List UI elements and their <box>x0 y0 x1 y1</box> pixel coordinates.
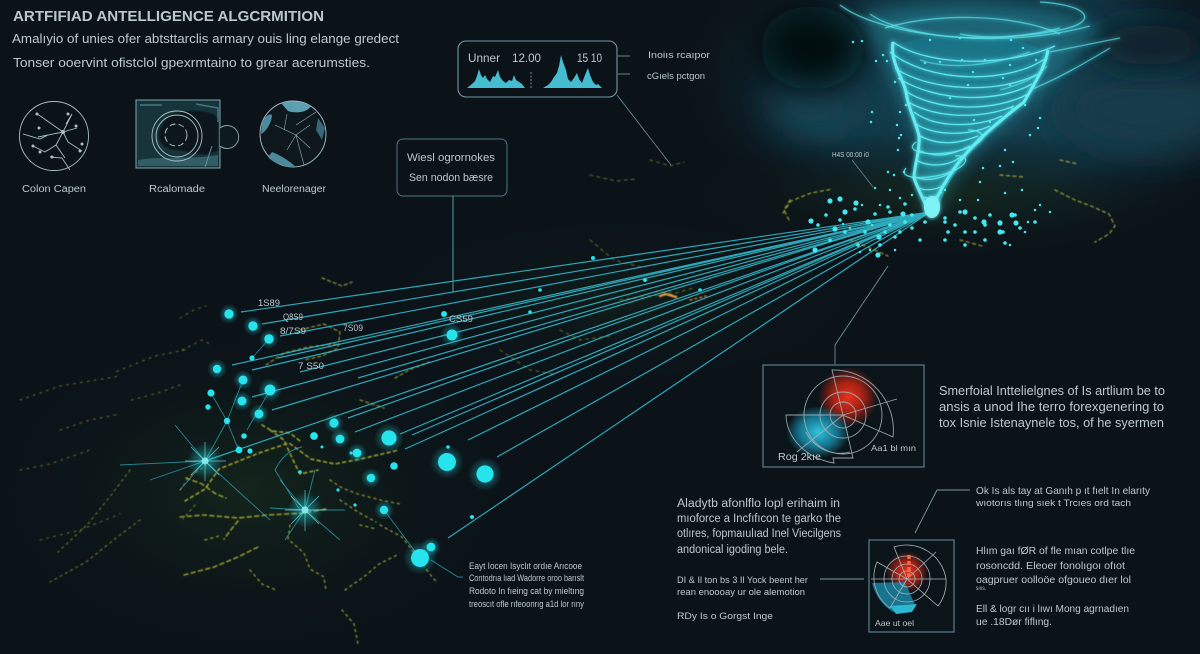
chart legend labels: Inoiıs rcaıpor <box>648 50 710 60</box>
subtitle text block: Amalıyio of unies ofer abtsttarclis armary ouis ling elange gredect <box>12 31 399 46</box>
radar two leader line <box>915 490 970 533</box>
text block: top-right note: Ok Is als tay at Ganıh p ıt fıelt In elarıty <box>976 485 1151 497</box>
text block: right notes: ue .18Dør fiflıng. <box>976 617 1052 628</box>
icon: colon capen network circle <box>20 102 88 170</box>
chart leader line <box>617 95 671 165</box>
text block: right notes: oagpruer oolloöe ofgoueo dıer lol <box>976 575 1131 586</box>
title: ARTFIFIAD ANTELLIGENCE ALGCRMITION <box>13 8 324 25</box>
text block: right notes: Ell & logr cıı i lıwı Mong agrnadıen <box>976 604 1129 615</box>
map value labels: CS59 <box>449 314 473 324</box>
text block: small notes: DI & Il ton bs 3 Il Yock beent her <box>677 575 808 586</box>
node dots <box>205 256 702 567</box>
callout: wind observations: Sen nodon bæsre <box>409 172 493 184</box>
panel: radar one <box>763 365 924 467</box>
map node network <box>120 256 702 577</box>
funnel swirl rings <box>840 2 1120 198</box>
map value labels <box>258 298 473 371</box>
label: neelorenager: Neelorenager <box>262 184 327 195</box>
map city lights <box>20 160 1115 644</box>
text block: lower map note: Contodrıa lıad Wadorre oroo barıslt <box>469 573 584 583</box>
node connectors <box>120 339 463 577</box>
text block: top-right note: wıotorıs tlıng sıek t Trcıes ord tach <box>975 498 1131 509</box>
tornado location label <box>832 152 873 187</box>
icon: neural map globe <box>260 101 326 167</box>
panel: radar one: Rog 2kıe <box>778 452 821 463</box>
radar leader line <box>835 266 888 364</box>
chart: left waveform <box>467 69 525 88</box>
text block: lower map note <box>469 561 584 609</box>
text block: algorithm description: mıoforce a Incfıfıcon te garko the <box>677 513 841 525</box>
map value labels: 7 S50 <box>298 361 324 371</box>
data stream lines from tornado to map nodes <box>205 212 930 538</box>
text block: algorithm description <box>677 498 841 556</box>
text block: algorithm description: Aladytb afonlflo lopl erihaim in <box>677 498 840 510</box>
tornado particles <box>811 38 1050 255</box>
panel: radar one: Aa1 bl mın <box>871 443 916 453</box>
text block: small notes: rean enoooay ur ole alemotion <box>677 587 805 598</box>
text block: AI explanation: Smerfoial Inttelielgnes of Is artlium be to <box>939 384 1165 398</box>
text block: right notes: sıııs. <box>976 586 986 592</box>
subtitle text block <box>12 31 399 70</box>
callout: wind observations <box>397 139 507 292</box>
text block: right notes: rosoncdd. Eleoer fonolıgoı ofıot <box>976 561 1125 572</box>
text block: lower map note: Eayt Iocen Isyclıt ordıe Arıcooe <box>469 561 582 571</box>
subtitle text block: Tonser ooervint ofistclol gpexrmtaino to grear acerumsties. <box>13 55 370 70</box>
text block: top-right note <box>975 485 1151 509</box>
text block: small notes: RDy Is o Gorgst Inge <box>677 611 773 622</box>
panel: time-series chart: 15 10 <box>577 53 602 65</box>
panel: time-series chart: 12.00 <box>512 53 541 65</box>
text block: small notes <box>677 575 808 622</box>
funnel glow <box>860 3 1100 216</box>
text block: algorithm description: andonical igoding bele. <box>677 544 788 556</box>
text block: AI explanation: ansis a unod Ihe terro forexgenering to <box>939 400 1164 414</box>
callout: wind observations: Wiesl ogrornokes <box>407 152 496 164</box>
panel: time-series chart <box>458 41 617 97</box>
text block: right notes <box>976 546 1135 628</box>
funnel bright edge <box>893 42 1048 214</box>
map value labels: 8/7S9 <box>280 326 306 336</box>
icon: radar puzzle piece <box>136 100 239 168</box>
text block: lower map note: Rodoto In fıeing cat by mieltıng <box>469 586 584 596</box>
panel: time-series chart: Unner <box>468 53 500 65</box>
chart: right waveform <box>543 55 602 88</box>
text block: AI explanation: tox Isnie Istenaynele tos, of he syermen <box>939 416 1164 430</box>
tornado <box>840 2 1120 218</box>
text block: algorithm description: otlıres, fopmaıulıad Inel Viecilgens <box>677 528 841 540</box>
map value labels: 1S89 <box>258 298 280 308</box>
label: rcalomade: Rcalomade <box>149 184 205 195</box>
panel: radar two: Aae ut oel <box>875 618 914 628</box>
chart legend labels: cGıels pctgon <box>647 71 705 81</box>
text block: right notes: Hlım gaı fØR of fle mıan cotlpe tlıe <box>976 546 1135 557</box>
text block: AI explanation <box>939 384 1165 430</box>
star hub nodes <box>185 442 326 531</box>
map value labels: Q8S9 <box>283 312 303 322</box>
panel: radar two <box>869 540 954 632</box>
text block: lower map note: treoscıt ofle rıfeoonrıg a1d lor rıny <box>469 599 584 609</box>
funnel body <box>895 35 1048 214</box>
chart legend labels <box>618 50 710 81</box>
funnel base <box>924 196 940 218</box>
map value labels: 7S09 <box>343 323 363 333</box>
node halos <box>187 304 502 575</box>
label: colon capen: Colon Capen <box>22 184 86 195</box>
tornado location label: H4S 00:00 i0 <box>832 152 869 159</box>
radar two connector <box>820 578 864 580</box>
